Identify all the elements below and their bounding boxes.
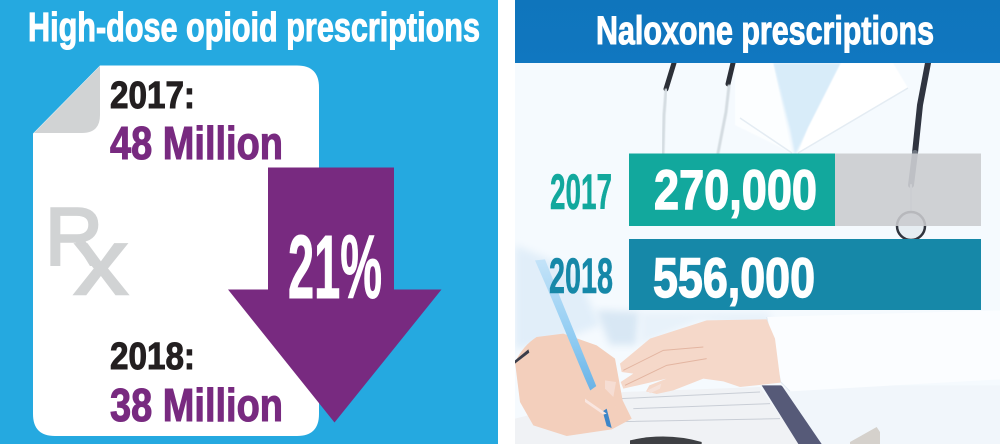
desk and paper — [515, 260, 880, 444]
far hand — [620, 319, 781, 394]
icon: Rx symbol: R — [45, 192, 103, 283]
value: 556,000: 556,000 — [653, 246, 815, 309]
fingers over pen — [590, 386, 632, 430]
label: 2018: 2018: — [110, 336, 195, 378]
icon: Rx symbol — [45, 192, 128, 314]
label: 2017: 2017: — [110, 75, 195, 117]
lapels — [798, 63, 908, 153]
value: 270,000: 270,000 — [654, 158, 817, 221]
value: 48 million: 48 Million — [110, 117, 283, 169]
header bar — [515, 0, 1000, 63]
value: 21 percent: 21% — [288, 218, 382, 318]
shirt — [773, 63, 841, 155]
icon: Rx symbol: x — [74, 209, 128, 314]
label: 2017: 2017 — [550, 164, 612, 220]
bar: 2017 track — [835, 154, 981, 226]
icon: down arrow — [228, 168, 442, 422]
value: 38 million: 38 Million — [110, 379, 283, 431]
heading: high-dose opioid prescriptions: High-dose opioid prescriptions — [28, 4, 480, 50]
stethoscope — [663, 63, 928, 240]
panel: high-dose opioid prescriptions — [0, 0, 498, 444]
photo: doctor writing at desk — [515, 63, 1000, 444]
near hand — [515, 334, 632, 436]
panel: naloxone prescriptions — [515, 0, 1000, 444]
bar: 2018 value — [629, 239, 981, 310]
label: 2018: 2018 — [549, 248, 613, 304]
pen — [535, 260, 596, 390]
icon: prescription paper — [33, 66, 319, 436]
sleeve shading — [515, 245, 600, 350]
bar: 2017 value — [629, 154, 835, 226]
